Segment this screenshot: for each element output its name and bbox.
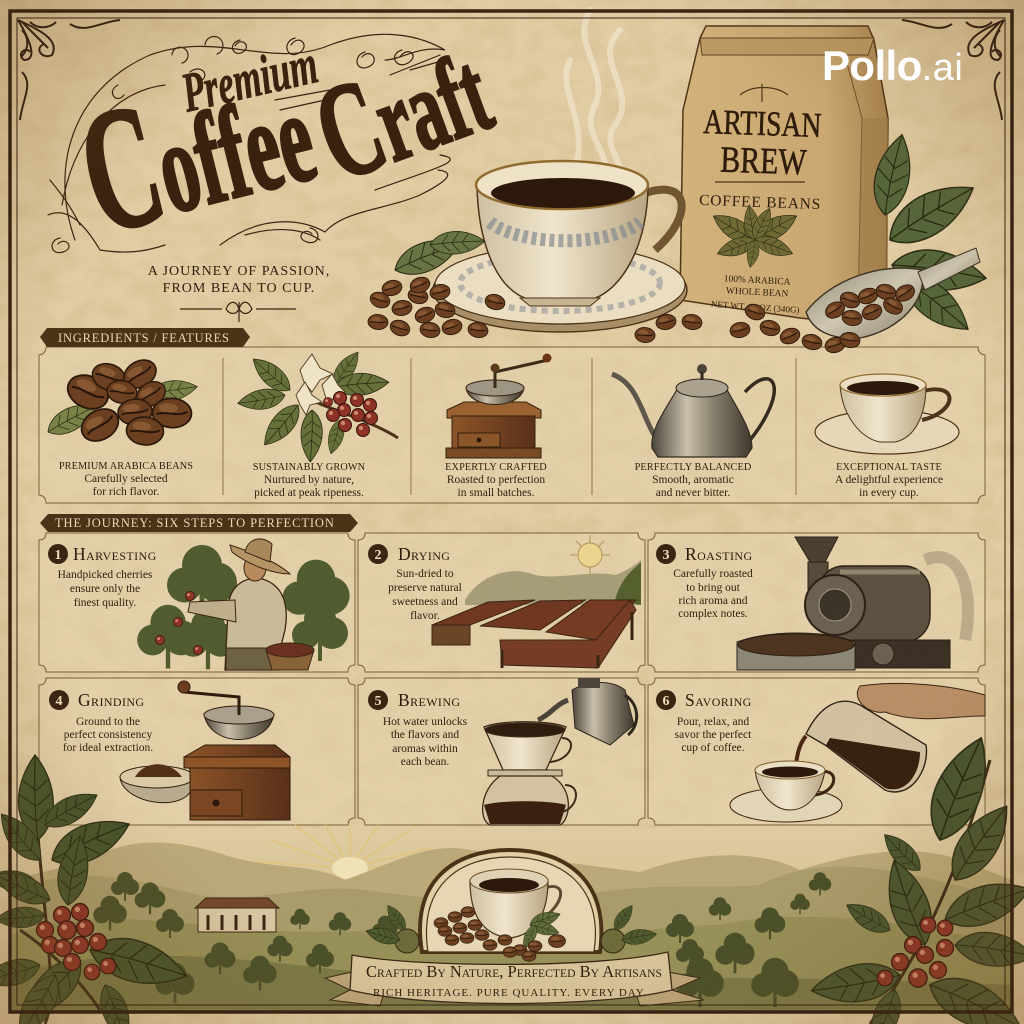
heading: Brewing bbox=[398, 690, 460, 710]
body text: Sun-dried to bbox=[396, 568, 454, 580]
body text: Carefully roasted bbox=[673, 568, 753, 580]
label: SUSTAINABLY GROWN bbox=[253, 462, 366, 473]
icon: beans bbox=[42, 354, 199, 447]
feature 3: expertly crafted bbox=[445, 354, 552, 499]
heading: Grinding bbox=[78, 690, 144, 710]
hero beans bbox=[367, 275, 703, 343]
step 5: brewing bbox=[368, 678, 637, 825]
body text: preserve natural bbox=[388, 582, 462, 594]
badge: 5 bbox=[374, 694, 382, 709]
bag sprig bbox=[708, 204, 801, 269]
corner ornaments bbox=[18, 20, 1004, 120]
feature 2: sustainably grown bbox=[236, 347, 398, 499]
farmhouse bbox=[195, 898, 279, 932]
label: EXPERTLY CRAFTED bbox=[445, 462, 547, 473]
label: Smooth, aromatic bbox=[652, 474, 734, 486]
label bbox=[445, 462, 547, 499]
body text bbox=[675, 716, 752, 754]
body text: the flavors and bbox=[391, 729, 459, 741]
label: in small batches. bbox=[458, 487, 535, 499]
landscape bbox=[12, 825, 1012, 1012]
step 3: roasting bbox=[656, 537, 968, 670]
Premium: Premium bbox=[175, 33, 323, 125]
body text bbox=[63, 716, 153, 754]
body text: Hot water unlocks bbox=[383, 716, 468, 728]
badge bbox=[368, 690, 388, 710]
step 6: savoring bbox=[656, 683, 985, 822]
body text bbox=[673, 568, 753, 620]
hero saucer bbox=[433, 246, 687, 332]
label bbox=[635, 462, 752, 499]
icon: cup and saucer bbox=[815, 374, 959, 454]
title bbox=[62, 12, 508, 271]
label: Carefully selected bbox=[84, 473, 168, 485]
label: Nurtured by nature, bbox=[264, 474, 354, 486]
heading: Savoring bbox=[685, 690, 752, 710]
icon: grinder bbox=[446, 354, 552, 458]
trees bbox=[93, 872, 831, 1007]
berries bbox=[37, 904, 116, 980]
illustration: pouring carafe bbox=[730, 683, 985, 822]
label bbox=[59, 461, 193, 498]
berries bbox=[877, 917, 953, 987]
panel: ingredients row bbox=[39, 347, 985, 503]
body text: cup of coffee. bbox=[681, 742, 745, 754]
label: for rich flavor. bbox=[93, 486, 159, 498]
Craft: Craft bbox=[297, 12, 508, 210]
feature 1: arabica beans bbox=[42, 354, 199, 498]
body text: perfect consistency bbox=[64, 729, 152, 741]
bag label: ARTISAN bbox=[703, 102, 822, 145]
tagline: FROM BEAN TO CUP. bbox=[163, 281, 315, 296]
label: in every cup. bbox=[859, 487, 919, 499]
medallion leaves bbox=[519, 908, 562, 951]
side scrolls bbox=[395, 929, 625, 953]
badge bbox=[49, 690, 69, 710]
illustration: pour-over bbox=[483, 678, 637, 825]
medallion cup bbox=[470, 869, 561, 938]
illustration: drying beds bbox=[432, 535, 641, 668]
bag label: 100% ARABICA bbox=[723, 274, 791, 288]
label: A delightful experience bbox=[835, 474, 943, 486]
badge: 4 bbox=[56, 694, 62, 709]
heading: Drying bbox=[398, 544, 450, 564]
body text: Pour, relax, and bbox=[677, 716, 749, 728]
section ribbon: ingredients: INGREDIENTS / FEATURES bbox=[58, 331, 230, 345]
body text bbox=[383, 716, 468, 768]
hero cup bbox=[476, 161, 682, 306]
badge bbox=[48, 544, 68, 564]
bag label bbox=[699, 102, 822, 315]
illustration: roaster bbox=[737, 537, 968, 670]
label: and never bitter. bbox=[656, 487, 730, 499]
feature 4: perfectly balanced bbox=[612, 364, 774, 499]
foliage: bottom left bbox=[0, 754, 192, 1024]
badge bbox=[656, 690, 676, 710]
badge: 3 bbox=[662, 548, 670, 563]
badge bbox=[656, 544, 676, 564]
tagline ornament bbox=[180, 302, 296, 322]
body text: sweetness and bbox=[392, 596, 458, 608]
label: Roasted to perfection bbox=[447, 474, 545, 486]
medallion bbox=[364, 850, 658, 961]
heading: Roasting bbox=[685, 544, 753, 564]
sun bbox=[332, 857, 368, 879]
bag label: NET WT. 12 OZ (340G) bbox=[711, 299, 800, 315]
badge: 1 bbox=[54, 548, 62, 563]
sun rays bbox=[255, 825, 450, 868]
icon: kettle bbox=[612, 364, 774, 457]
banner: Crafted By Nature, Perfected By Artisans bbox=[366, 962, 662, 981]
hero leaf bbox=[389, 229, 486, 283]
section ribbon: journey: THE JOURNEY: SIX STEPS TO PERFECTION bbox=[55, 516, 335, 530]
body text: Handpicked cherries bbox=[58, 569, 153, 581]
badge: 2 bbox=[374, 548, 382, 563]
step 4: grinding bbox=[49, 681, 290, 820]
illustration: farmer picking bbox=[137, 539, 350, 670]
medallion beans bbox=[434, 907, 566, 961]
feature 5: exceptional taste bbox=[815, 374, 959, 499]
flourishes around title bbox=[48, 34, 450, 253]
body text: savor the perfect bbox=[675, 729, 752, 741]
label bbox=[253, 462, 366, 499]
steam bbox=[566, 10, 622, 180]
bag label: COFFEE BEANS bbox=[699, 192, 821, 213]
tagline: A JOURNEY OF PASSION, bbox=[148, 264, 330, 279]
banner bbox=[325, 952, 704, 1006]
body text: complex notes. bbox=[678, 608, 748, 620]
illustration: grinder and grounds bbox=[120, 681, 290, 820]
heading: Harvesting bbox=[73, 544, 157, 564]
coffee bag bbox=[680, 26, 888, 322]
badge: 6 bbox=[662, 694, 670, 709]
body text: for ideal extraction. bbox=[63, 742, 153, 754]
icon: coffee branch bbox=[236, 347, 398, 462]
body text: to bring out bbox=[686, 582, 741, 594]
body text: ensure only the bbox=[70, 583, 140, 595]
label bbox=[835, 462, 943, 499]
body text: finest quality. bbox=[74, 597, 136, 609]
label: EXCEPTIONAL TASTE bbox=[836, 462, 942, 473]
tagline bbox=[148, 264, 330, 296]
bag leaves bbox=[868, 131, 989, 342]
body text: rich aroma and bbox=[679, 595, 748, 607]
body text: aromas within bbox=[392, 743, 458, 755]
bag label: BREW bbox=[720, 140, 807, 183]
section ribbon: journey bbox=[40, 514, 358, 532]
section ribbon: ingredients bbox=[40, 328, 250, 347]
banner: RICH HERITAGE. PURE QUALITY. EVERY DAY. bbox=[373, 987, 647, 999]
body text bbox=[388, 568, 462, 622]
label: PERFECTLY BALANCED bbox=[635, 462, 752, 473]
scoop with beans bbox=[729, 248, 980, 355]
body text: flavor. bbox=[410, 610, 440, 622]
body text: Ground to the bbox=[76, 716, 140, 728]
Coffee: C bbox=[62, 66, 180, 271]
step 2: drying bbox=[368, 535, 641, 668]
watermark: Pollo.ai: Pollo.ai bbox=[822, 42, 963, 89]
panel: steps grid bbox=[39, 533, 985, 825]
label: picked at peak ripeness. bbox=[254, 487, 364, 499]
body text bbox=[58, 569, 153, 609]
step 1: harvesting bbox=[48, 539, 350, 670]
Coffee: offee bbox=[142, 63, 327, 241]
foliage: bottom right bbox=[808, 729, 1024, 1024]
body text: each bean. bbox=[401, 756, 449, 768]
bag label: WHOLE BEAN bbox=[726, 286, 789, 300]
badge bbox=[368, 544, 388, 564]
label: PREMIUM ARABICA BEANS bbox=[59, 461, 193, 472]
